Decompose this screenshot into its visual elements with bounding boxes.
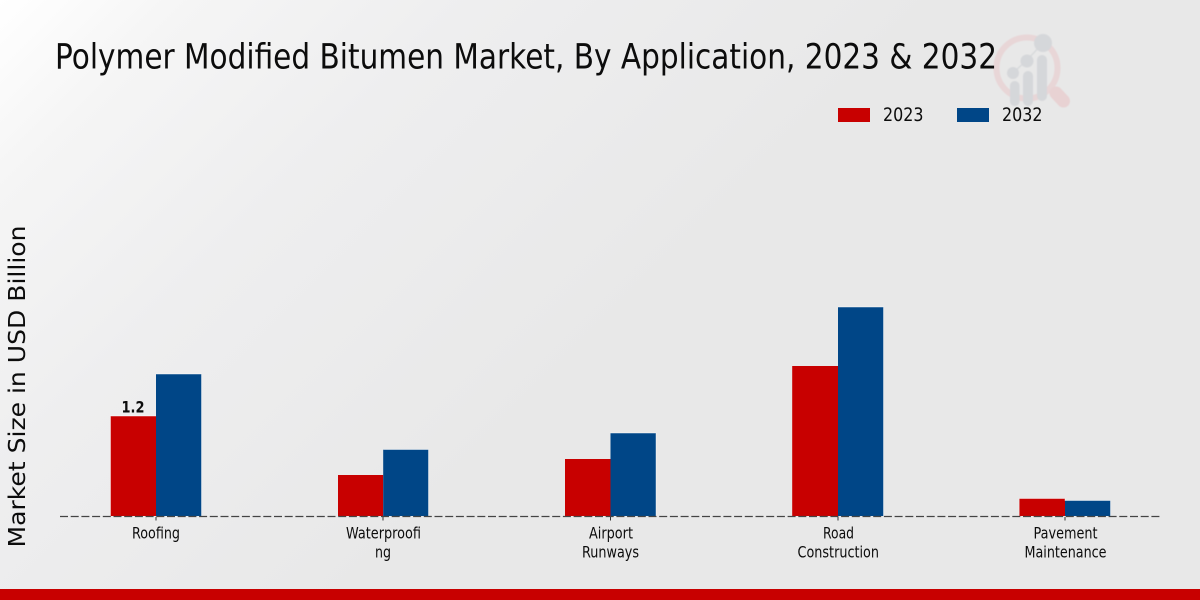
y axis label: Market Size in USD Billion	[3, 226, 31, 548]
category label: Pavement Maintenance: Maintenance	[1024, 542, 1106, 562]
bars: Roofing	[110, 374, 202, 516]
footer bar	[0, 589, 1200, 600]
category label: Waterproofing	[346, 524, 421, 562]
category label: Road Construction	[798, 524, 879, 562]
category label: Road Construction: Construction	[798, 542, 879, 562]
value label: 1.2	[122, 397, 144, 416]
category label: Airport Runways: Runways	[582, 542, 639, 562]
category label: Waterproofing: Waterproofi	[346, 524, 421, 542]
category label: Pavement Maintenance: Pavement	[1034, 524, 1098, 542]
bar chart	[60, 307, 1160, 562]
category label: Roofing: Roofing	[132, 524, 180, 542]
bars: Airport Runways	[565, 433, 656, 516]
legend	[838, 104, 1042, 126]
category label: Waterproofing: ng	[375, 542, 391, 562]
watermark logo	[996, 34, 1064, 106]
category label: Pavement Maintenance	[1024, 524, 1106, 562]
bars: Waterproofing	[338, 450, 428, 516]
title: Polymer Modified Bitumen Market, By Application, 2023 & 2032	[55, 38, 997, 78]
category label: Airport Runways: Airport	[589, 524, 633, 542]
category label: Road Construction: Road	[823, 524, 854, 542]
bars: Road Construction	[792, 307, 884, 516]
category label: Airport Runways	[582, 524, 639, 562]
legend: 2023	[883, 104, 924, 126]
bars: Pavement Maintenance	[1019, 498, 1110, 516]
legend: 2032	[1002, 104, 1042, 126]
